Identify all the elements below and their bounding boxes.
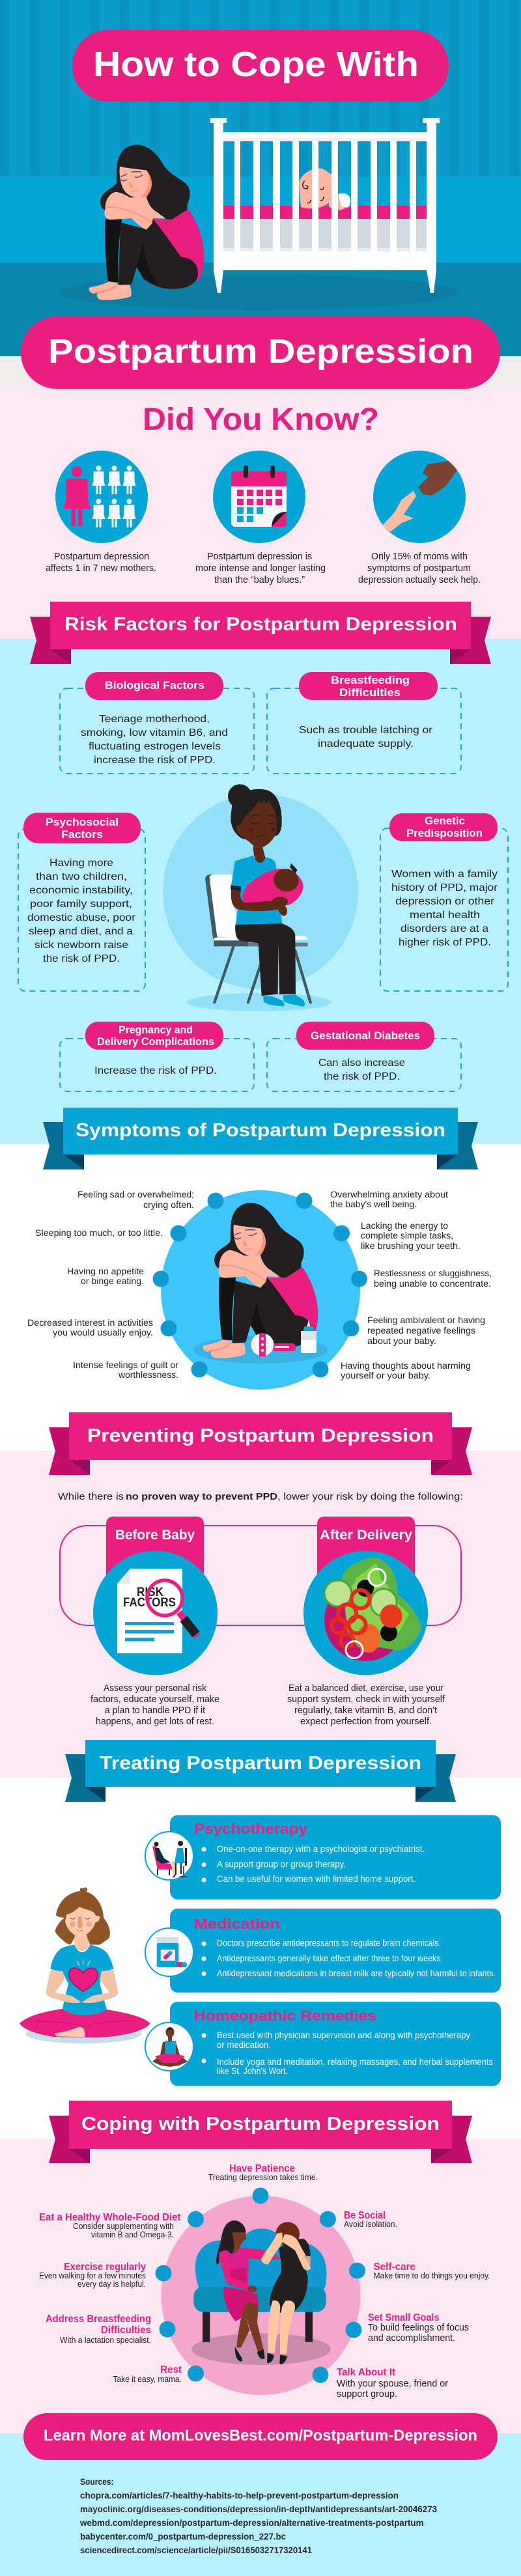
panel: Medication: Antidepressants generally take effect after three to four weeks. [217,1953,443,1963]
ribbon heading: Preventing: Preventing Postpartum Depression [87,1425,434,1446]
panel: Psychosocial Factors: than two children, [36,871,127,882]
panel: Genetic Predisposition: history of PPD, major [391,882,498,893]
text: coping tips: Have Patience [229,2163,295,2174]
text: coping tips: Difficulties [101,2325,151,2336]
floor shadow [59,275,458,310]
text: coping tips: Even walking for a few minutes [39,2271,146,2280]
title pill: How to Cope With [72,30,449,102]
ribbon heading: Coping [49,2101,472,2163]
panel: Breastfeeding Difficulties [267,672,461,774]
text: after delivery tips: support system, check in with yourself [287,1694,445,1705]
ribbon heading: Treating: Treating Postpartum Depression [100,1753,421,1774]
text: symptoms list: Having no appetite [67,1267,144,1276]
panel: Psychosocial Factors: sick newborn raise [35,940,128,951]
panel: Gestational Diabetes: the risk of PPD. [324,1071,400,1082]
text: symptoms list: or binge eating. [81,1276,144,1286]
ribbon heading: Risk Factors [30,602,491,664]
panel: After Delivery: After Delivery [320,1528,412,1543]
panel: Psychosocial Factors: economic instability, [29,885,133,896]
panel: Homeopathic Remedies [145,2002,501,2086]
text: before baby tips [91,1683,219,1727]
text: coping tips: and accomplishment. [368,2333,455,2344]
illustration: meditating woman [20,1887,150,2043]
text: prevention intro: While there is [58,1492,124,1502]
panel: Biological Factors: increase the risk of PPD. [94,755,216,766]
panel: Breastfeeding Difficulties: inadequate supply. [318,738,414,749]
text: stat two: more intense and longer lasting [195,563,326,574]
text: symptoms list: Feeling ambivalent or having [367,1315,485,1325]
text: before baby tips: factors, educate yourself, make [91,1694,219,1705]
text: stat three: symptoms of postpartum [367,563,471,574]
text: coping tips: Be Social [344,2210,386,2221]
illustration: coping circle with two women on sofa [155,2188,365,2395]
text: after delivery tips: Eat a balanced diet, exercise, use your [289,1683,444,1694]
panel: Psychosocial Factors: the risk of PPD. [43,953,120,964]
panel: Biological Factors: Biological Factors [105,679,204,692]
text: symptoms list: Having thoughts about harming [341,1361,471,1371]
text: after delivery tips: regularly, take vitamin B, and don't [294,1705,437,1716]
text: sources [79,2476,437,2555]
panel: Psychosocial Factors: Having more [49,858,113,869]
text: stat three: depression actually seek help. [358,575,481,585]
panel: Pregnancy and Delivery Complications: Pregnancy and [119,1024,193,1036]
text: after delivery tips: expect perfection from yourself. [300,1716,432,1727]
panel: Genetic Predisposition: mental health [410,910,480,921]
text: symptoms list: Feeling sad or overwhelmed; [77,1190,194,1199]
icon: baby rattle [251,1334,296,1356]
panel: Biological Factors [60,672,254,774]
panel: Genetic Predisposition: higher risk of PPD. [399,937,491,948]
call to action pill [23,2413,498,2460]
text: before baby tips: happens, and get lots of rest. [96,1716,214,1727]
text: coping tips: Treating depression takes time. [208,2172,318,2182]
text: prevention intro: no proven way to prevent PPD [126,1492,277,1502]
panel: After Delivery [287,1517,445,1727]
text: coping tips: Self-care [374,2261,415,2273]
panel: Gestational Diabetes [267,1022,461,1091]
dots around circle [152,1193,367,1378]
title pill: Postpartum Depression: Postpartum Depression [48,333,473,371]
panel: Pregnancy and Delivery Complications: Delivery Complications [97,1035,214,1048]
text: stat one: affects 1 in 7 new mothers. [46,563,156,574]
panel: Breastfeeding Difficulties: Such as trouble latching or [299,725,433,736]
text: symptoms list: repeated negative feelings [367,1326,475,1336]
text: coping tips [39,2163,490,2400]
outline connecting prevention cards [60,1526,461,1625]
panel: Psychosocial Factors: domestic abuse, poor [27,912,136,923]
ribbon heading: Risk Factors: Risk Factors for Postpartum Depression [64,614,457,635]
text: coping tips: Rest [160,2364,182,2375]
panel: Breastfeeding Difficulties: Breastfeeding [331,674,410,686]
panel: Medication [145,1909,501,1993]
ribbon heading: Treating [65,1740,456,1802]
icon: reaching hands [382,461,457,532]
text: symptoms list: Decreased interest in activities [27,1318,153,1328]
panel: Psychosocial Factors: poor family support, [30,899,132,910]
panel: Gestational Diabetes: Can also increase [318,1057,405,1069]
text: coping tips: To build feelings of focus [368,2323,469,2333]
text: stat three [358,552,481,585]
illustration: mother holding baby on chair [163,784,358,1011]
panel: Psychotherapy: A support group or group therapy. [217,1860,346,1869]
text: coping tips: Exercise regularly [64,2261,146,2273]
text: symptoms list: Lacking the energy to [361,1221,448,1231]
text: stat three: Only 15% of moms with [371,552,468,562]
text: symptoms list: crying often. [143,1200,194,1210]
panel: Gestational Diabetes: Gestational Diabetes [311,1029,420,1042]
title pill: How to Cope With: How to Cope With [93,45,419,84]
text: sources: sciencedirect.com/science/article/pii/S0165032717320141 [80,2545,312,2555]
text: sources: webmd.com/depression/postpartum-depression/alternative-treatments-postpartum [79,2517,423,2528]
icon: yoga woman [145,2023,193,2071]
icon: pill bottle [145,1928,193,1976]
icon: risk factors document [117,1569,197,1653]
illustration: symptoms circle with mother [152,1190,367,1390]
text: stat two [195,552,326,585]
text: coping tips: Address Breastfeeding [46,2314,151,2325]
panel: stat seek help [358,451,481,585]
ribbon heading: Coping: Coping with Postpartum Depression [81,2114,440,2135]
text: stat two: Postpartum depression is [207,552,312,562]
text: coping tips: Set Small Goals [368,2312,440,2323]
text: symptoms list: you would usually enjoy. [53,1328,153,1337]
text: symptoms list: yourself or your baby. [341,1371,430,1380]
text: coping tips: vitamin B and Omega-3. [91,2230,174,2239]
text: symptoms list: Restlessness or sluggishness, [374,1268,492,1278]
text: symptoms list: about your baby. [367,1336,436,1346]
text: symptoms list: complete simple tasks, [361,1231,453,1240]
panel: Psychosocial Factors: Factors [61,828,103,841]
panel: Psychosocial Factors: Psychosocial [46,816,119,828]
text: coping tips: every day is helpful. [77,2279,146,2289]
text: coping tips: With a lactation specialist. [60,2335,151,2345]
text: before baby tips: Assess your personal risk [104,1683,207,1694]
ribbon heading: Symptoms [43,1108,478,1169]
title pill: Postpartum Depression [21,316,500,389]
text: stat one [46,552,156,574]
panel: Homeopathic Remedies: like St. John's Wort. [217,2066,288,2076]
text: prevention intro [58,1492,463,1502]
icon: women group [63,466,135,527]
illustration: crib with sleeping baby [210,118,440,293]
panel: Before Baby [91,1517,219,1727]
panel: Breastfeeding Difficulties: Difficulties [339,686,401,699]
text: symptoms list: being unable to concentrate. [374,1279,491,1289]
panel: Genetic Predisposition: Genetic [425,815,465,827]
panel: Genetic Predisposition: disorders are at a [401,923,488,934]
dots around circle [155,2188,365,2383]
panel: Psychosocial Factors: sleep and diet, and a [29,926,133,937]
illustration: sad mother [89,145,204,300]
text: coping tips: Eat a Healthy Whole-Food Diet [39,2212,181,2223]
panel: Genetic Predisposition [380,813,508,991]
text: stat two: than the “baby blues.” [214,575,305,585]
text: symptoms list: Overwhelming anxiety about [330,1190,448,1199]
text: sources: chopra.com/articles/7-healthy-habits-to-help-prevent-postpartum-depression [80,2490,399,2500]
text: symptoms list: Intense feelings of guilt or [73,1360,179,1370]
panel: stat 1 in 7 mothers [46,451,156,574]
panel: Psychotherapy: Can be useful for women with limited home support. [217,1874,415,1884]
panel: Psychosocial Factors [18,813,145,991]
text: coping tips: Take it easy, mama. [113,2374,182,2384]
text: coping tips: Avoid isolation. [344,2219,397,2229]
panel: Homeopathic Remedies: Best used with physician supervision and along with psychotherapy [217,2030,470,2040]
text: coping tips: With your spouse, friend or [337,2379,448,2389]
panel: Psychotherapy [145,1815,501,1899]
panel: Genetic Predisposition: Predisposition [406,827,483,839]
text: symptoms list: the baby's well being. [330,1199,417,1209]
panel: Genetic Predisposition: depression or other [395,896,495,907]
text: symptoms list: worthlessness. [118,1370,178,1380]
text: sources: babycenter.com/0_postpartum-depression_227.bc [80,2531,286,2541]
panel: Medication: Doctors prescribe antidepressants to regulate brain chemicals. [217,1938,441,1948]
heading: Did You Know: Did You Know? [143,402,379,437]
icon: risk factors document: RISK [137,1586,163,1599]
icon: baby bottle [301,1320,317,1353]
text: before baby tips: a plan to handle PPD if it [105,1705,205,1716]
text: coping tips: support group. [337,2389,397,2400]
panel: Biological Factors: Teenage motherhood, [99,714,210,725]
panel: Before Baby: Before Baby [115,1528,195,1543]
icon: calendar [231,466,287,527]
panel: Homeopathic Remedies: or medication. [217,2040,271,2050]
text: symptoms list: Sleeping too much, or too little. [35,1228,163,1238]
panel: stat baby blues [195,451,326,585]
icon: salad plate [324,1558,421,1661]
panel: Pregnancy and Delivery Complications [60,1022,254,1091]
text: after delivery tips [287,1683,445,1727]
panel: Homeopathic Remedies: Homeopathic Remedies [194,2008,376,2024]
panel: Psychotherapy: Psychotherapy [194,1821,308,1837]
panel: Genetic Predisposition: Women with a family [391,869,498,880]
text: coping tips: Talk About It [337,2367,396,2378]
text: coping tips: Make time to do things you enjoy. [374,2271,490,2280]
ribbon heading: Preventing [49,1412,472,1475]
text: stat one: Postpartum depression [54,552,149,562]
text: sources: mayoclinic.org/diseases-conditions/depression/in-depth/antidepressants/art-20046273 [80,2504,437,2514]
panel: Biological Factors: smoking, low vitamin B6, and [81,727,228,738]
icon: therapy session [145,1832,193,1880]
panel: Medication: Medication [194,1916,280,1932]
panel: Medication: Antidepressant medications in breast milk are typically not harmful to infants. [217,1968,496,1978]
ribbon heading: Symptoms: Symptoms of Postpartum Depression [76,1120,445,1141]
panel: Homeopathic Remedies: Include yoga and meditation, relaxing massages, and herbal supplements [217,2057,493,2067]
panel: Psychotherapy: One-on-one therapy with a psychologist or psychiatrist. [217,1844,425,1854]
text: prevention intro: , lower your risk by doing the following: [277,1492,463,1502]
panel: Pregnancy and Delivery Complications: Increase the risk of PPD. [94,1065,217,1076]
text: coping tips: Consider supplementing with [73,2221,174,2231]
call to action pill: Learn More at MomLovesBest.com/Postpartum-Depression [44,2427,477,2444]
icon: risk factors document: FACTORS [123,1596,176,1610]
text: symptoms list: like brushing your teeth. [361,1241,460,1251]
panel: Biological Factors: fluctuating estrogen levels [89,741,221,752]
text: symptoms list [27,1190,492,1380]
text: sources: Sources: [80,2476,113,2487]
